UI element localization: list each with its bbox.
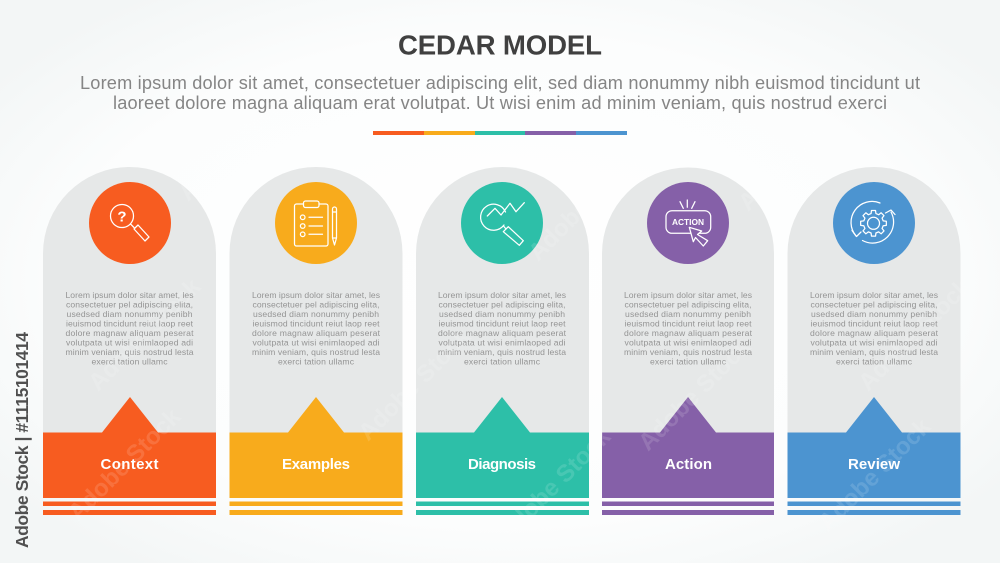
text block: Examples: exerci tation ullamc [278,356,355,366]
subtitle text block: Lorem ipsum dolor sit amet, consectetuer adipiscing elit, sed diam nonummy nibh euismod tincidunt ut [80,73,920,93]
text block: Review: usedsed diam nonummy penibh [811,309,937,319]
label block: Review: Review [848,456,900,473]
panel: Examples [230,167,402,515]
text block: Review: minim veniam, quis nostrud lesta [810,347,938,357]
panel: Context [43,167,216,515]
label block: Review [788,397,960,515]
stock watermark pattern: Adobe Stock [63,403,187,526]
text block: Examples: ieuismod tincidunt reiut laop reet [252,318,380,328]
text block: Examples: usedsed diam nonummy penibh [253,309,379,319]
text block: Diagnosis: ieuismod tincidunt reiut laop reet [438,318,566,328]
text block: Review [810,290,939,366]
multicolour title divider [373,131,627,135]
text block: Context: exerci tation ullamc [92,356,168,366]
text block: Review: dolore magnaw aliquam peserat [810,328,939,338]
text block: Context: volutpata ut wisi enimlaoped adi [66,338,193,348]
icon: magnifier with trend line [481,203,524,245]
text block: Action: usedsed diam nonummy penibh [625,309,751,319]
text block: Context: dolore magnaw aliquam peserat [66,328,194,338]
text block: Review: consectetuer pel adipiscing elita, [810,300,938,310]
stock watermark pattern: Adobe Stock [523,143,647,266]
icon: magnifier with question mark [110,204,149,241]
text block: Action [624,290,753,366]
stock watermark pattern: Adobe Stock [733,93,857,216]
text block: Examples: minim veniam, quis nostrud lesta [252,347,380,357]
icon: clipboard and pencil [294,201,336,246]
stock watermark pattern: Adobe Stock [853,273,977,396]
text block: Context [66,290,194,366]
text block: Examples: consectetuer pel adipiscing elita, [252,300,380,310]
text block: Diagnosis: dolore magnaw aliquam peserat [438,328,567,338]
text block: Action: volutpata ut wisi enimlaoped adi [624,338,752,348]
stock watermark pattern: Adobe Stock [83,273,207,396]
text block: Diagnosis [438,290,567,366]
label block: Examples [230,397,402,515]
text block: Diagnosis: Lorem ipsum dolor sitar amet, les [438,290,566,300]
text block: Examples: volutpata ut wisi enimlaoped adi [252,338,380,348]
text block: Context: consectetuer pel adipiscing elita, [66,300,193,310]
text block: Review: ieuismod tincidunt reiut laop reet [810,318,938,328]
stock watermark pattern [63,83,977,546]
text block: Action: ieuismod tincidunt reiut laop reet [624,318,752,328]
icon: magnifier with question mark: ? [117,208,127,226]
label block: Diagnosis [416,397,589,515]
text block: Action: Lorem ipsum dolor sitar amet, les [624,290,752,300]
stock watermark pattern: Adobe Stock [813,413,937,536]
label block: Action: Action [665,456,712,473]
label block: Context: Context [100,456,158,473]
text block: Diagnosis: usedsed diam nonummy penibh [439,309,565,319]
text block: Diagnosis: minim veniam, quis nostrud lesta [438,347,566,357]
text block: Examples: dolore magnaw aliquam peserat [252,328,381,338]
text block: Review: volutpata ut wisi enimlaoped adi [810,338,938,348]
stock watermark pattern: Adobe Stock [173,83,297,206]
stock id text: Adobe Stock | #1115101414 [12,332,32,548]
text block: Context: Lorem ipsum dolor sitar amet, les [66,290,194,300]
text block: Context: usedsed diam nonummy penibh [66,309,193,319]
text block: Context: ieuismod tincidunt reiut laop reet [66,318,194,328]
title: CEDAR MODEL [398,30,602,60]
subtitle text block: laoreet dolore magna aliquam erat volutpat. Ut wisi enim ad minim veniam, quis nostrud exerci [113,93,887,113]
text block: Diagnosis: exerci tation ullamc [464,356,541,366]
text block: Context: minim veniam, quis nostrud lesta [66,347,194,357]
icon: action button with cursor: ACTION [672,217,704,227]
label block: Context [43,397,216,515]
icon: action button with cursor [666,200,711,246]
text block: Review: Lorem ipsum dolor sitar amet, les [810,290,938,300]
panel: Diagnosis [416,167,589,515]
stock watermark pattern: Adobe Stock [633,333,757,456]
label block: Examples: Examples [282,456,350,473]
text block: Review: exerci tation ullamc [836,356,913,366]
text block: Examples [252,290,381,366]
text block: Examples: Lorem ipsum dolor sitar amet, les [252,290,380,300]
label block: Diagnosis: Diagnosis [468,456,536,473]
subtitle text block [80,73,920,113]
label block: Action [602,397,774,515]
icon: gear with cycle arrows [851,201,895,243]
text block: Action: minim veniam, quis nostrud lesta [624,347,752,357]
stock watermark pattern: Adobe Stock [353,323,477,446]
text block: Action: consectetuer pel adipiscing elita, [624,300,752,310]
text block: Action: dolore magnaw aliquam peserat [624,328,753,338]
panel: Review [788,167,960,515]
stock watermark pattern: Adobe Stock [493,423,617,546]
text block: Diagnosis: volutpata ut wisi enimlaoped adi [438,338,566,348]
panel: Action [602,168,774,515]
text block: Diagnosis: consectetuer pel adipiscing elita, [438,300,566,310]
text block: Action: exerci tation ullamc [650,356,727,366]
